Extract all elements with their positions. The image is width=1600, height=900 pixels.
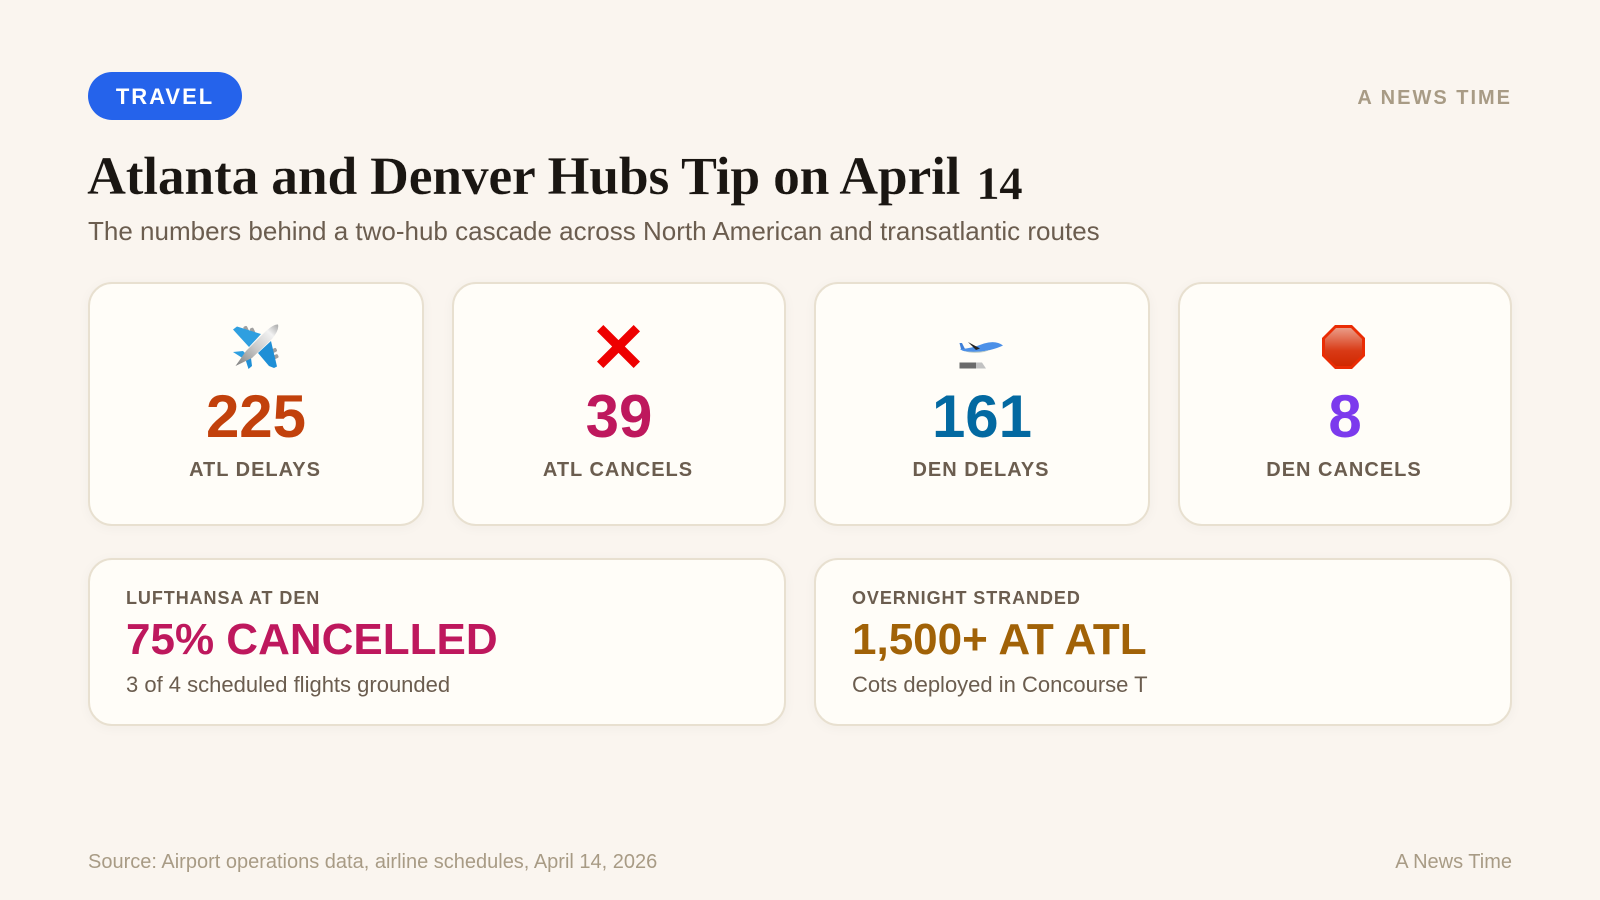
source: Source: Airport operations data, airline schedules, April 14, 2026 [88, 851, 657, 873]
value: 225 [206, 383, 306, 450]
category badge: TRAVEL [116, 84, 214, 109]
label: ATL CANCELS [543, 459, 693, 481]
panel description: 3 of 4 scheduled flights grounded [126, 672, 450, 697]
panel description: Cots deployed in Concourse T [852, 672, 1148, 697]
icon: stop sign [1322, 325, 1365, 369]
panel: ATL cancels [452, 282, 786, 526]
label: DEN DELAYS [912, 459, 1050, 481]
panel: Lufthansa at DEN [88, 558, 786, 726]
panel: DEN delays [814, 282, 1150, 526]
panel label: LUFTHANSA AT DEN [126, 588, 320, 608]
brand name: A NEWS TIME [1357, 87, 1512, 109]
value: 161 [932, 383, 1032, 450]
icon: red cross [597, 325, 640, 368]
panel label: OVERNIGHT STRANDED [852, 588, 1081, 608]
panel value: 1,500+ AT ATL [852, 615, 1147, 664]
title: Atlanta and Denver Hubs Tip on April 14 [87, 146, 1022, 210]
value: 39 [586, 383, 652, 450]
label: DEN CANCELS [1266, 459, 1422, 481]
icon: airplane [233, 324, 279, 369]
engines [243, 325, 279, 360]
label: ATL DELAYS [189, 459, 321, 481]
panel: overnight stranded [814, 558, 1512, 726]
subtitle: The numbers behind a two-hub cascade across North American and transatlantic routes [88, 216, 1100, 246]
panel: DEN cancels [1178, 282, 1512, 526]
category badge [88, 72, 242, 120]
icon: departing plane [960, 342, 1003, 368]
panel: ATL delays [88, 282, 424, 526]
value: 8 [1328, 383, 1362, 450]
panel value: 75% CANCELLED [126, 615, 498, 664]
footer brand: A News Time [1395, 851, 1512, 873]
